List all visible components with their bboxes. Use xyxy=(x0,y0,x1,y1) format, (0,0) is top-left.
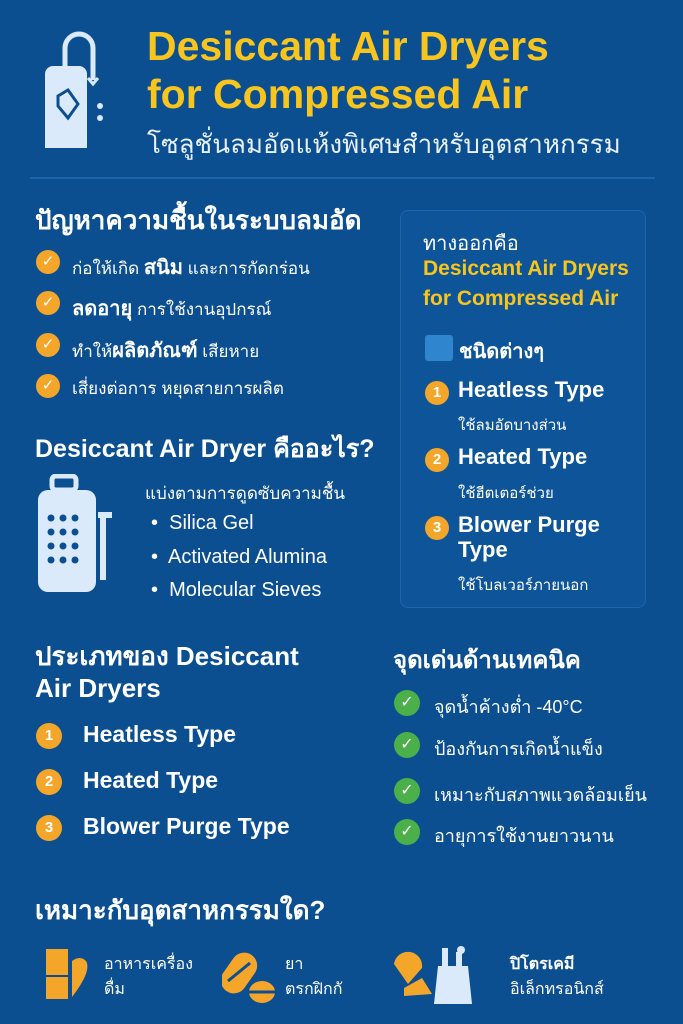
title xyxy=(147,23,549,117)
list: problems: ทำให้ผลิตภัณฑ์ เสียหาย xyxy=(72,340,259,362)
list: desiccant materials: • Activated Alumina xyxy=(151,546,327,568)
list: types: 3 xyxy=(45,819,53,836)
title: Desiccant Air Dryers xyxy=(147,23,549,69)
panel: solution: 1 xyxy=(433,384,441,401)
text: food industry: อาหารเครื่อง xyxy=(104,956,193,973)
text: pharma xyxy=(285,956,342,998)
heading: what is: Desiccant Air Dryer คืออะไร? xyxy=(35,435,375,463)
panel: solution: ใช้ลมอัดบางส่วน xyxy=(458,417,566,434)
icon: electronics/factory xyxy=(394,946,472,1004)
panel: solution xyxy=(400,210,646,608)
list: highlights: จุดน้ำค้างต่ำ -40°C xyxy=(434,697,583,717)
list: types xyxy=(36,721,290,841)
heading: technical highlights: จุดเด่นด้านเทคนิค xyxy=(393,647,581,674)
heading: types: ประเภทของ Desiccant xyxy=(35,641,299,671)
list: highlights xyxy=(394,690,647,847)
icon: header dryer xyxy=(45,32,103,148)
list: types: Heated Type xyxy=(83,767,218,793)
text: pharma: ยา xyxy=(285,956,303,973)
panel: solution: Type xyxy=(458,537,508,562)
list: problems xyxy=(36,250,310,398)
panel: solution: ใช้ฮีตเตอร์ช่วย xyxy=(458,485,554,502)
list: highlights: ✓ xyxy=(400,694,414,711)
list: highlights: ✓ xyxy=(400,736,414,753)
subtitle: โซลูชั่นลมอัดแห้งพิเศษสำหรับอุตสาหกรรม xyxy=(147,129,621,159)
panel: solution: Heatless Type xyxy=(458,377,604,402)
list: highlights: ป้องกันการเกิดน้ำแข็ง xyxy=(434,739,603,759)
panel: solution: ทางออกคือ xyxy=(423,233,519,255)
list: problems: ✓ xyxy=(42,253,54,270)
list: highlights: อายุการใช้งานยาวนาน xyxy=(434,826,614,846)
list: highlights: ✓ xyxy=(400,823,414,840)
text: food industry: ดื่ม xyxy=(104,981,125,998)
list: types: 1 xyxy=(45,727,53,744)
icon: food xyxy=(46,949,88,999)
list: types: Blower Purge Type xyxy=(83,813,290,839)
text: electronics: ปิโตรเคมี xyxy=(510,956,574,973)
list: problems: ✓ xyxy=(42,294,54,311)
panel: solution: for Compressed Air xyxy=(423,287,618,310)
list: types: Heatless Type xyxy=(83,721,236,747)
list: highlights: ✓ xyxy=(400,782,414,799)
heading: types xyxy=(35,641,299,703)
text: electronics xyxy=(509,954,604,998)
list: highlights: เหมาะกับสภาพแวดล้อมเย็น xyxy=(434,785,647,805)
list: desiccant materials: • Molecular Sieves xyxy=(151,579,321,601)
list: types: 2 xyxy=(45,773,53,790)
panel: solution: ชนิดต่างๆ xyxy=(459,341,544,363)
panel: solution: Heated Type xyxy=(458,444,587,469)
list: problems: ก่อให้เกิด สนิม และการกัดกร่อน xyxy=(72,257,310,279)
heading: moisture problems: ปัญหาความชื้นในระบบลมอัด xyxy=(35,205,362,235)
icon: blue square xyxy=(425,335,453,361)
list: desiccant materials xyxy=(145,481,345,601)
panel: solution: 2 xyxy=(433,451,441,468)
icon: pharma xyxy=(222,952,275,1003)
list: problems: ลดอายุ การใช้งานอุปกรณ์ xyxy=(72,298,271,320)
panel: solution: 3 xyxy=(433,519,441,536)
title: for Compressed Air xyxy=(147,71,528,117)
heading: industries: เหมาะกับอุตสาหกรรมใด? xyxy=(35,895,325,925)
text: electronics: อิเล็กทรอนิกส์ xyxy=(510,981,604,998)
text: food industry xyxy=(104,952,193,998)
text: pharma: ตรกฝิกกั xyxy=(285,981,342,998)
icon: dryer tank xyxy=(38,474,112,592)
list: problems: ✓ xyxy=(42,336,54,353)
panel: solution: Blower Purge xyxy=(458,512,600,537)
panel: solution: Desiccant Air Dryers xyxy=(423,257,629,280)
panel: solution: ใช้โบลเวอร์ภายนอก xyxy=(458,577,588,594)
heading: types: Air Dryers xyxy=(35,673,161,703)
list: desiccant materials: • Silica Gel xyxy=(151,512,254,534)
list: problems: เสี่ยงต่อการ หยุดสายการผลิต xyxy=(72,379,284,398)
list: problems: ✓ xyxy=(42,377,54,394)
list: desiccant materials: แบ่งตามการดูดซับความชื้น xyxy=(145,484,345,503)
